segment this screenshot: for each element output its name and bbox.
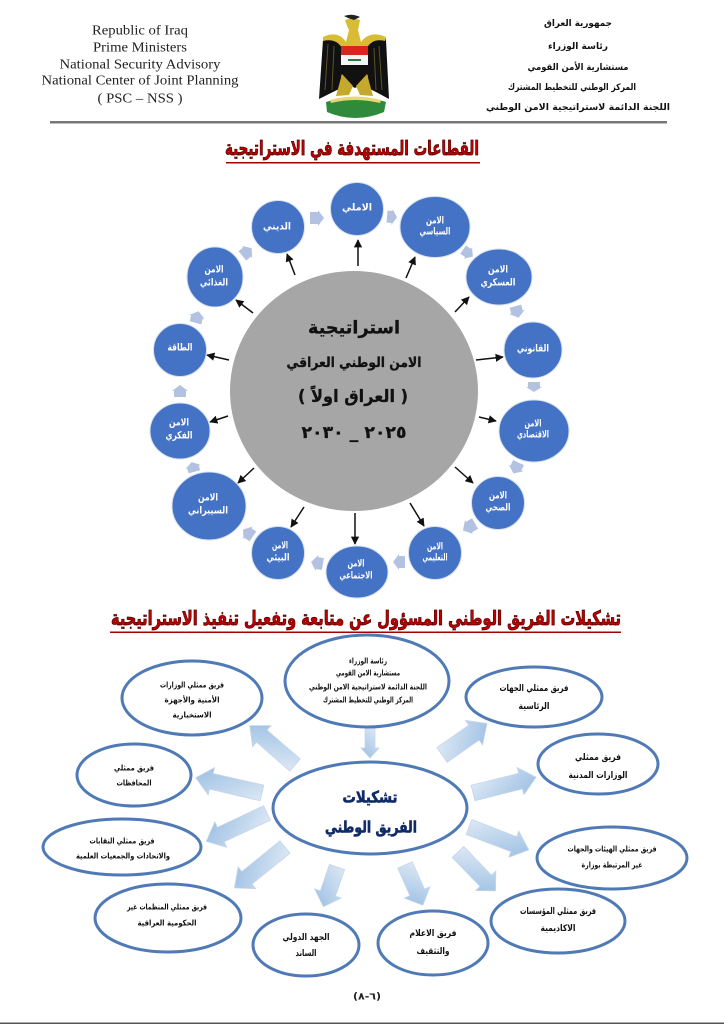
ellipse: presidency team: الرئاسية — [518, 702, 550, 712]
ellipse: unions team: فريق ممثلي النقابات — [90, 836, 154, 846]
sector: health: الصحي — [486, 502, 510, 514]
ellipse: central national team: تشكيلات — [342, 788, 398, 806]
ellipse: NGOs team — [95, 884, 241, 952]
central circle: strategy title: ( العراق اولاً ) — [298, 385, 408, 407]
ellipse: NGOs team: فريق ممثلي المنظمات غير — [126, 902, 207, 912]
ellipse: media team: فريق الاعلام — [410, 929, 457, 939]
sector: security — [330, 182, 384, 236]
ellipse: security ministries team: الأمنية والأجهزة — [164, 694, 220, 704]
block arrows: team formations — [193, 711, 539, 911]
ellipse: international effort: الساند — [296, 949, 316, 959]
ellipse: academic institutions team: فريق ممثلي المؤسسات — [520, 907, 596, 917]
ellipse: prime ministry and advisory bodies: رئاسة الوزراء — [349, 656, 387, 666]
header: Arabic organisation block: رئاسة الوزراء — [548, 42, 608, 52]
sector: environment: البيئي — [266, 552, 290, 564]
ellipse: prime ministry and advisory bodies: مستشارية الامن القومي — [336, 668, 400, 678]
header: English organisation block: Prime Ministers — [93, 40, 187, 56]
central circle: strategy title — [230, 271, 478, 511]
sector: environment — [252, 526, 304, 580]
icon: Iraqi coat of arms eagle — [319, 15, 389, 118]
sector: economic: الاقتصادي — [517, 430, 549, 440]
ellipse: governorates team: فريق ممثلي — [114, 764, 154, 772]
sector: intellectual — [150, 403, 210, 459]
ellipse: academic institutions team — [491, 889, 625, 953]
sector: religious — [252, 200, 304, 254]
sector: social — [326, 546, 388, 598]
ellipse: independent bodies team — [537, 827, 687, 889]
header: English organisation block: Republic of Iraq — [92, 24, 188, 38]
sector: legal: القانوني — [517, 344, 549, 354]
ellipse: security ministries team: فريق ممثلي الوزارات — [160, 680, 224, 690]
header: English organisation block: National Security Advisory — [60, 58, 220, 72]
sector: military: العسكري — [480, 278, 516, 288]
ellipse: prime ministry and advisory bodies: اللجنة الدائمة لاستراتيجية الامن الوطني — [309, 682, 427, 692]
sector: education — [408, 526, 462, 580]
central circle: strategy title: ٢٠٢٥ _ ٢٠٣٠ — [302, 423, 406, 443]
sector: political: الامن — [426, 216, 444, 226]
ellipse: security ministries team — [122, 661, 262, 735]
ellipse: civil ministries team — [538, 734, 658, 794]
header: English organisation block: ( PSC – NSS ) — [98, 92, 183, 106]
ellipse: media team: والتثقيف — [416, 947, 450, 957]
sector: economic: الامن — [524, 418, 542, 430]
sector: intellectual: الامن — [169, 418, 189, 428]
sector: cyber — [172, 472, 246, 540]
sector: religious: الديني — [263, 222, 291, 232]
ellipse: academic institutions team: الاكاديمية — [540, 924, 576, 934]
sector: political — [400, 196, 470, 258]
sector: food: الغذائي — [200, 278, 228, 288]
sector: security: الاملي — [342, 202, 372, 214]
central circle: strategy title: الامن الوطني العراقي — [286, 355, 422, 371]
sector: health — [472, 476, 524, 530]
ellipse: governorates team — [77, 744, 191, 806]
sector: cyber: السيبراني — [188, 506, 228, 516]
page number: (٦-٨) — [353, 992, 381, 1002]
ellipse: central national team — [273, 762, 467, 854]
header: English organisation block: National Center of Joint Planning — [42, 74, 238, 88]
sector: health: الامن — [489, 490, 507, 502]
header: Arabic organisation block: مستشارية الأمن القومي — [528, 61, 628, 73]
sector: food — [187, 247, 243, 307]
header divider — [50, 121, 667, 124]
central circle: strategy title: استراتيجية — [308, 318, 400, 338]
arrows: ring between sectors — [172, 209, 542, 572]
ellipse: presidency team: فريق ممثلي الجهات — [500, 684, 569, 694]
sector: legal — [504, 322, 562, 378]
ellipse: unions team — [43, 819, 201, 875]
ellipse: independent bodies team: غير المرتبطة بوزارة — [582, 860, 642, 870]
sector: intellectual: الفكري — [166, 430, 192, 442]
ellipse: governorates team: المحافظات — [116, 778, 152, 788]
ellipse: central national team: الفريق الوطني — [325, 818, 417, 838]
sector: environment: الامن — [272, 540, 288, 552]
sector: energy: الطاقة — [168, 342, 192, 354]
header: Arabic organisation block: جمهورية العراق — [544, 19, 612, 29]
header: Arabic organisation block — [486, 19, 670, 113]
header: English organisation block — [42, 24, 238, 106]
ellipse: international effort — [253, 914, 359, 976]
ellipse: unions team: والاتحادات والجمعيات العلمية — [76, 852, 170, 860]
ellipse: civil ministries team: الوزارات المدنية — [568, 771, 628, 781]
bottom page edge — [0, 1022, 724, 1024]
ellipse: prime ministry and advisory bodies — [285, 635, 449, 727]
sector: political: السياسي — [420, 226, 450, 238]
sector: food: الامن — [204, 264, 224, 276]
ellipse: NGOs team: الحكومية العراقية — [138, 918, 197, 928]
sector: military: الامن — [488, 264, 508, 276]
heading: targeted sectors: القطاعات المستهدفة في الاستراتيجية — [225, 136, 479, 161]
ellipse: independent bodies team: فريق ممثلي الهيئات والجهات — [568, 844, 656, 854]
ellipse: presidency team — [466, 667, 602, 727]
ellipse: international effort: الجهد الدولي — [282, 933, 330, 943]
ellipse: security ministries team: الاستخبارية — [172, 710, 212, 720]
sector: social: الامن — [348, 558, 364, 570]
sector: energy — [154, 324, 206, 376]
sector: education: الامن — [427, 542, 443, 552]
arrows: centre to sectors — [207, 240, 503, 544]
sector: cyber: الامن — [198, 492, 218, 504]
ellipse: media team — [378, 911, 488, 975]
header: Arabic organisation block: المركز الوطني للتخطيط المشترك — [508, 83, 636, 93]
ellipse: prime ministry and advisory bodies: المركز الوطني للتخطيط المشترك — [323, 696, 413, 704]
header: Arabic organisation block: اللجنة الدائمة لاستراتيجية الامن الوطني — [486, 103, 670, 113]
sector: military — [466, 249, 532, 305]
sector: economic — [499, 400, 569, 462]
sector: social: الاجتماعي — [340, 570, 372, 582]
ellipse: civil ministries team: فريق ممثلي — [575, 753, 621, 763]
sector: education: التعليمي — [422, 552, 448, 564]
